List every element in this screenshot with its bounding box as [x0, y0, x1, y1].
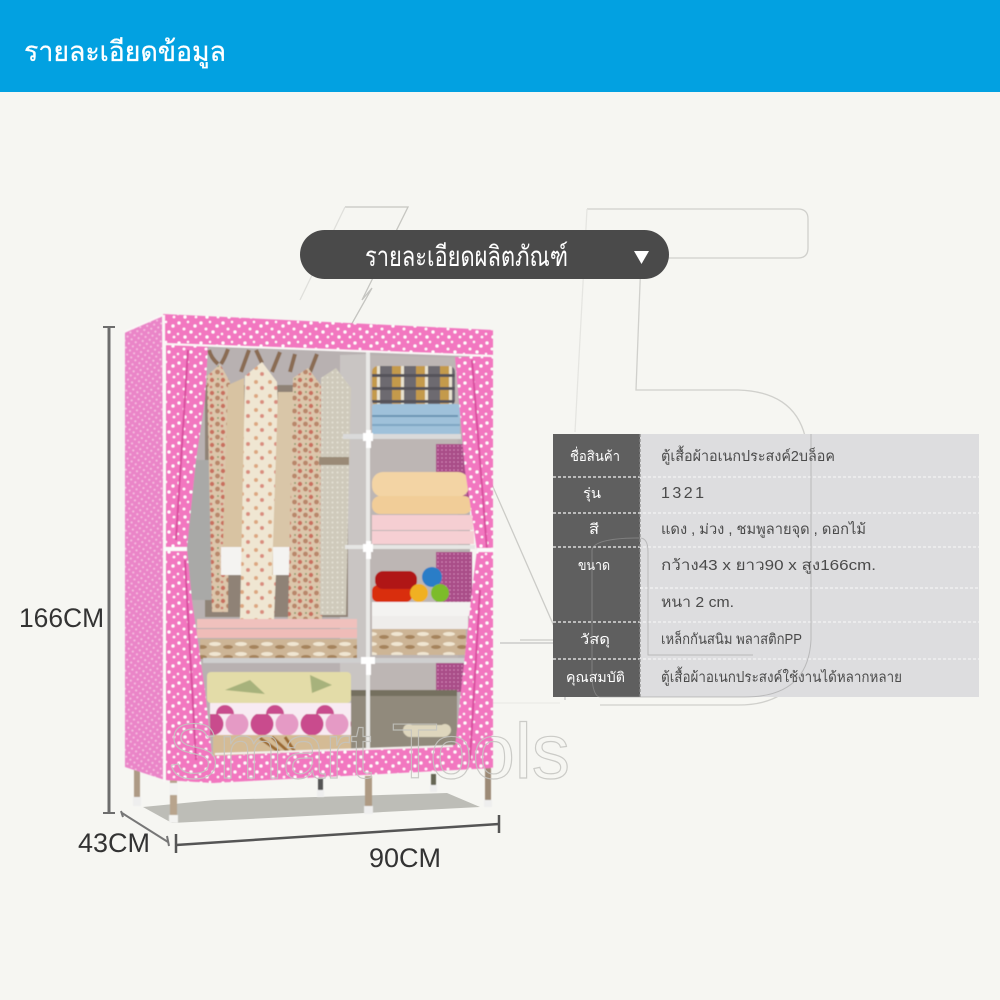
side panel: [125, 315, 165, 780]
header title: รายละเอียดข้อมูล: [24, 36, 226, 69]
table row labels: วัสดุ: [580, 631, 610, 648]
left curtain: [166, 344, 215, 783]
icon: dropdown triangle: [634, 251, 649, 264]
table row values: กว้าง43 x ยาว90 x สูง166cm.: [661, 557, 876, 574]
watermark logo outlines: [300, 207, 808, 705]
table row labels: ขนาด: [578, 557, 610, 573]
label: height: 166CM: [19, 603, 104, 633]
right shelf folded stacks: [372, 366, 474, 692]
table row labels: ชื่อสินค้า: [570, 447, 620, 464]
table row values: หนา 2 cm.: [661, 595, 734, 611]
header bar: [0, 0, 1000, 92]
depth dimension line: [121, 811, 169, 846]
label: width: 90CM: [369, 843, 441, 873]
table row labels: คุณสมบัติ: [566, 669, 625, 686]
product details pill heading: รายละเอียดผลิตภัณฑ์: [365, 241, 568, 272]
table row values: เหล็กกันสนิม พลาสติกPP: [661, 629, 802, 648]
label: depth: 43CM: [78, 828, 150, 858]
specifications table: [553, 434, 979, 697]
top valance: [163, 314, 493, 356]
bottom valance: [166, 742, 493, 783]
watermark brand text: Smart Tools: [168, 707, 570, 795]
wardrobe product illustration: [124, 314, 494, 823]
storage box: [351, 690, 457, 750]
shadow behind hanging clothes: [205, 385, 348, 617]
table row values: 1321: [661, 485, 704, 502]
table row values: แดง , ม่วง , ชมพูลายจุด , ดอกไม้: [661, 520, 866, 538]
product details pill heading: [300, 230, 669, 279]
table row labels: รุ่น: [583, 485, 601, 502]
table row values: ตู้เสื้อผ้าอเนกประสงค์ใช้งานได้หลากหลาย: [661, 666, 902, 686]
hanging clothes: [187, 362, 351, 620]
width dimension line: [176, 815, 499, 853]
table row labels: สี: [589, 521, 600, 537]
hanging rail and hangers: [209, 349, 317, 372]
right curtain: [453, 356, 493, 768]
wardrobe legs: [133, 768, 492, 823]
watermark lines over table: [592, 434, 811, 697]
table row values: [661, 445, 902, 686]
interior back wall: [190, 344, 470, 765]
shelves and poles: [203, 352, 475, 752]
table row labels: [566, 447, 625, 686]
height dimension line: [103, 327, 115, 813]
floor shadow: [143, 793, 480, 823]
left lower stacks: [197, 619, 357, 757]
table row values: ตู้เสื้อผ้าอเนกประสงค์2บล็อค: [661, 445, 835, 465]
